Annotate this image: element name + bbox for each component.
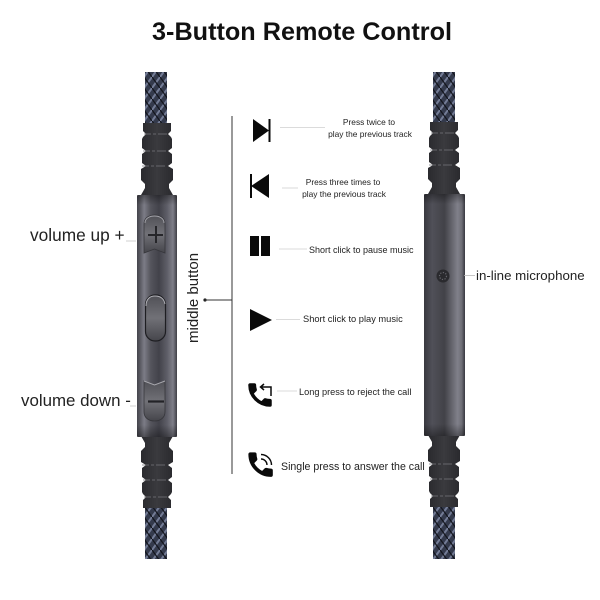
right remote body — [424, 194, 465, 436]
leader line 5 — [277, 390, 297, 392]
leader line 3 — [279, 248, 307, 250]
right top braided cable — [433, 72, 455, 124]
title: 3-Button Remote Control — [152, 18, 452, 46]
volume down button — [144, 381, 165, 421]
right cable microphone side — [424, 72, 465, 559]
leader line 2 — [282, 187, 298, 189]
left top strain relief — [141, 123, 173, 195]
left bottom braided cable — [145, 505, 167, 559]
text: press twice: play the previous track — [328, 129, 413, 139]
label: volume up: volume up + — [30, 225, 125, 245]
volume up button — [144, 215, 165, 253]
icon: answer call phone — [249, 453, 272, 476]
text: answer call: Single press to answer the call — [281, 461, 425, 473]
right bottom strain relief — [428, 435, 460, 507]
left bottom strain relief — [141, 436, 173, 508]
middle button — [146, 295, 166, 341]
text: press twice: Press twice to — [343, 117, 395, 127]
right bottom braided cable — [433, 505, 455, 559]
text: press three times: Press three times to — [306, 177, 381, 187]
left remote body — [137, 195, 177, 437]
icon: previous track — [250, 174, 269, 198]
label: in-line microphone: in-line microphone — [476, 268, 585, 283]
text: play: Short click to play music — [303, 314, 403, 324]
microphone hole — [436, 270, 450, 282]
icon: next track — [253, 119, 270, 142]
text: pause: Short click to pause music — [309, 245, 414, 255]
leader line: microphone — [464, 274, 475, 276]
icon: pause — [250, 236, 270, 256]
bracket line — [231, 116, 233, 474]
left top braided cable — [145, 72, 167, 125]
leader line 1 — [280, 126, 325, 128]
label: middle button: middle button — [185, 253, 202, 343]
label: volume down: volume down - — [21, 391, 131, 410]
text: reject call: Long press to reject the call — [299, 387, 411, 397]
icon: play — [250, 309, 272, 331]
icon: reject call phone — [249, 384, 271, 406]
leader line 4 — [276, 318, 300, 320]
right top strain relief — [428, 122, 460, 194]
left cable remote — [137, 72, 177, 559]
text: press three times: play the previous track — [302, 189, 387, 199]
connector: middle button to bracket — [203, 298, 232, 302]
